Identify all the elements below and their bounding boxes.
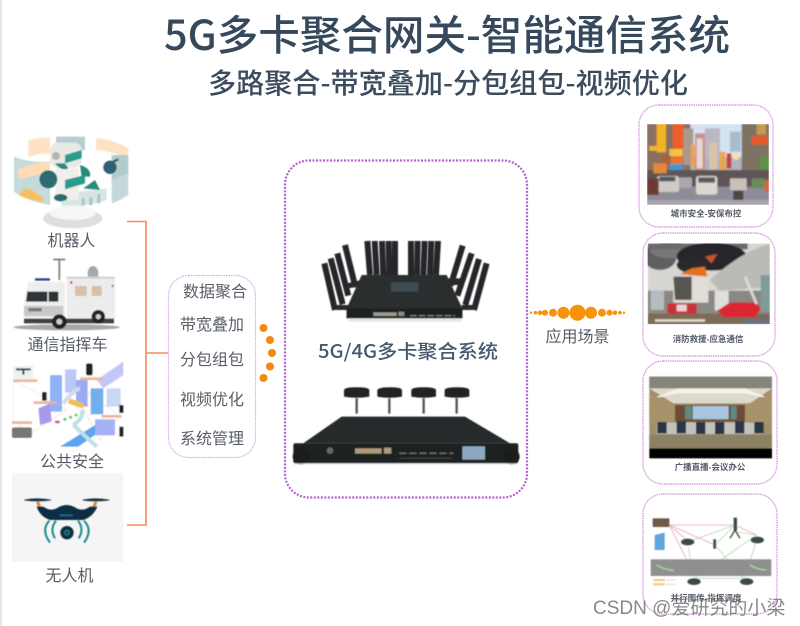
function: system management: 系统管理 bbox=[180, 430, 244, 448]
panel: city security bbox=[639, 105, 773, 227]
panel: dispatch network bbox=[643, 494, 777, 614]
icon: public safety city bbox=[12, 360, 123, 447]
caption: 城市安全-安保布控 bbox=[671, 208, 742, 218]
photo: fire rescue bbox=[643, 242, 770, 324]
connector bracket bbox=[127, 222, 168, 525]
orange dot arc bbox=[260, 324, 276, 382]
title: 5G多卡聚合网关-智能通信系统 bbox=[164, 2, 730, 62]
label: robot: 机器人 bbox=[47, 232, 96, 250]
diagram: command network bbox=[651, 518, 771, 585]
device: antenna router bbox=[324, 241, 487, 322]
label: application scenarios: 应用场景 bbox=[545, 327, 610, 346]
subtitle: 多路聚合-带宽叠加-分包组包-视频优化 bbox=[208, 62, 688, 102]
icon: command vehicle bbox=[13, 259, 120, 330]
device: rack gateway with puck antennas bbox=[293, 387, 520, 465]
panel: central system bbox=[285, 160, 527, 498]
caption: 消防救援-应急通信 bbox=[673, 334, 744, 344]
icon: robot bbox=[14, 137, 128, 228]
caption: 并行图传-指挥调度 bbox=[671, 593, 742, 603]
caption: 广播直播-会议办公 bbox=[675, 462, 746, 472]
label: public safety: 公共安全 bbox=[40, 453, 104, 471]
orange dot wave bbox=[530, 305, 625, 321]
panel: conference bbox=[643, 361, 777, 484]
panel: functions bbox=[168, 276, 256, 458]
watermark: CSDN @爱研究的小梁 bbox=[593, 597, 785, 619]
function: data aggregation: 数据聚合 bbox=[183, 283, 247, 301]
photo: conference room bbox=[649, 377, 772, 458]
icon: drone bbox=[12, 473, 123, 562]
photo: city street bbox=[647, 124, 769, 205]
label: command vehicle: 通信指挥车 bbox=[27, 336, 108, 354]
function: packet grouping: 分包组包 bbox=[180, 351, 244, 369]
panel heading: 5G/4G多卡聚合系统 bbox=[318, 337, 498, 364]
panel: fire rescue bbox=[643, 233, 775, 356]
function: bandwidth stacking: 带宽叠加 bbox=[180, 316, 244, 334]
label: drone: 无人机 bbox=[45, 567, 94, 585]
function: video optimisation: 视频优化 bbox=[180, 391, 244, 409]
